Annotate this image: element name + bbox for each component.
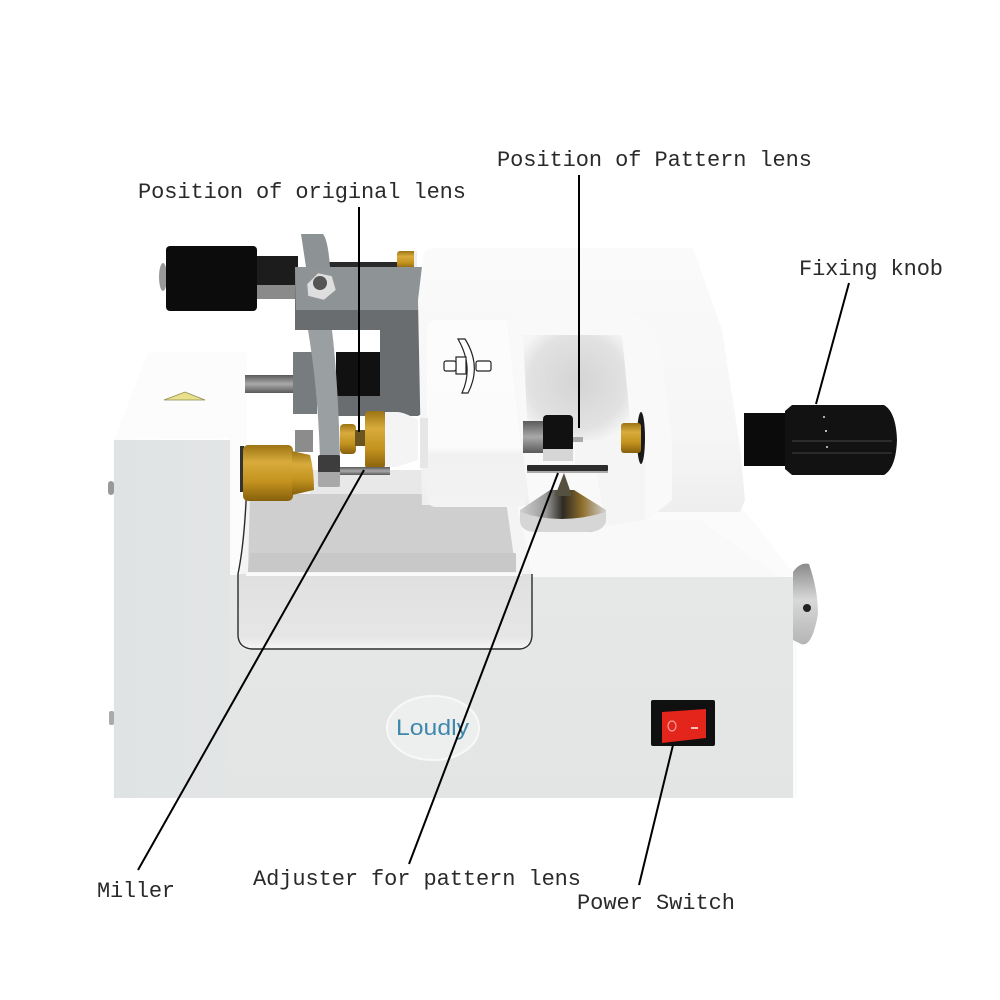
rear brass collar [397, 251, 417, 269]
label: Fixing knob: Fixing knob [799, 257, 943, 282]
right side adjustment wheel [793, 564, 818, 644]
side screws on left edge [108, 481, 114, 725]
brand badge [387, 696, 479, 760]
right brass collar [621, 412, 645, 464]
grey carriage arm [293, 234, 425, 487]
black fixing knob [744, 405, 897, 475]
leader lines [138, 175, 849, 885]
adjuster dome [520, 473, 606, 532]
lens icon on housing [444, 339, 491, 393]
power switch [651, 700, 715, 746]
warning triangle label [164, 392, 205, 400]
label: Position of original lens: Position of original lens [138, 180, 466, 205]
brand badge: Loudly [396, 715, 469, 740]
label: Miller: Miller [97, 879, 175, 904]
pattern lens holder [523, 415, 608, 473]
machine base body [113, 352, 797, 798]
label: Position of Pattern lens: Position of Pattern lens [497, 148, 812, 173]
head housing [418, 248, 745, 526]
rear black knob and shaft [159, 246, 400, 311]
label: Adjuster for pattern lens: Adjuster for pattern lens [253, 867, 581, 892]
original lens brass assembly [240, 411, 428, 501]
label: Power Switch: Power Switch [577, 891, 735, 916]
steel rod to left block [245, 375, 295, 393]
tray [238, 470, 532, 650]
hex bolt [307, 273, 336, 300]
